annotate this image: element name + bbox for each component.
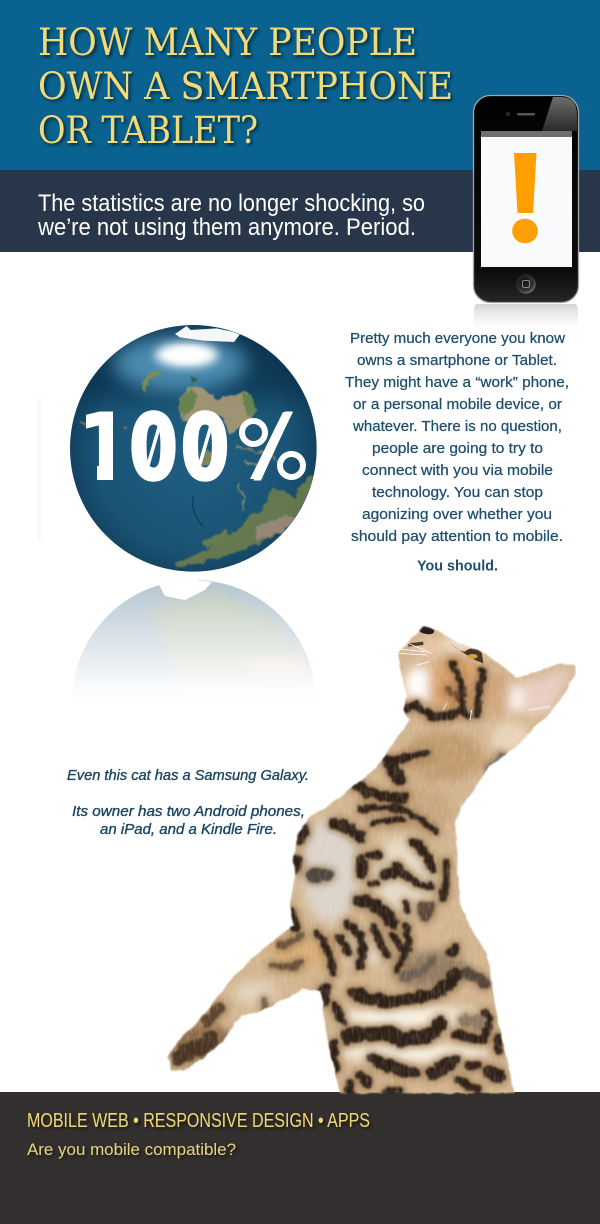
title: OR TABLET? [38,109,258,152]
100% figure: 0 [129,396,178,501]
subtitle: The statistics are no longer shocking, so [38,190,425,217]
title: OWN A SMARTPHONE [38,65,453,108]
phone screen [481,131,572,137]
footer band [0,1092,600,1224]
100% figure: 0 [180,396,230,501]
body paragraph: people are going to try to [372,441,543,457]
exclamation mark [514,153,536,213]
cat caption: Its owner has two Android phones, [72,804,305,820]
title: HOW MANY PEOPLE [38,21,417,64]
faint edge stripe [38,398,41,540]
body paragraph: owns a smartphone or Tablet. [357,353,557,369]
ice cap [175,326,241,342]
landmasses [140,369,317,568]
body paragraph: Pretty much everyone you know [350,331,566,347]
footer text [27,1110,370,1159]
cat markings [180,663,503,1092]
100% figure: % [238,396,308,501]
cat caption: Even this cat has a Samsung Galaxy. [67,768,309,784]
footer text: MOBILE WEB • RESPONSIVE DESIGN • APPS [27,1110,370,1132]
body paragraph: agonizing over whether you [362,507,552,523]
body paragraph [345,331,569,574]
cat caption: an iPad, and a Kindle Fire. [100,822,277,838]
subtitle [37,190,425,241]
body paragraph: They might have a “work” phone, [345,375,569,391]
phone body [474,96,578,302]
body paragraph: should pay attention to mobile. [351,529,563,545]
100% figure [86,410,306,482]
cat face details [418,626,434,634]
body paragraph: or a personal mobile device, or [353,397,562,413]
conclusion: You should. [417,558,498,574]
home button [516,274,536,294]
cat colour regions [170,637,573,1063]
100% figure: 1 [78,396,132,501]
header band [0,0,600,170]
footer question: Are you mobile compatible? [27,1140,236,1159]
subtitle band [0,170,600,252]
globe [70,325,317,572]
title [38,21,453,152]
body paragraph: connect with you via mobile [362,463,553,479]
phone reflection [474,304,578,330]
body paragraph: technology. You can stop [372,485,543,501]
globe with 100% [70,325,317,572]
body paragraph: whatever. There is no question, [352,419,562,435]
globe reflection [74,580,314,682]
subtitle: we’re not using them anymore. Period. [37,214,416,241]
cat illustration [160,610,593,1103]
fur texture [171,633,556,1094]
cat caption [67,768,309,838]
icon: smartphone with exclamation mark [474,96,578,330]
